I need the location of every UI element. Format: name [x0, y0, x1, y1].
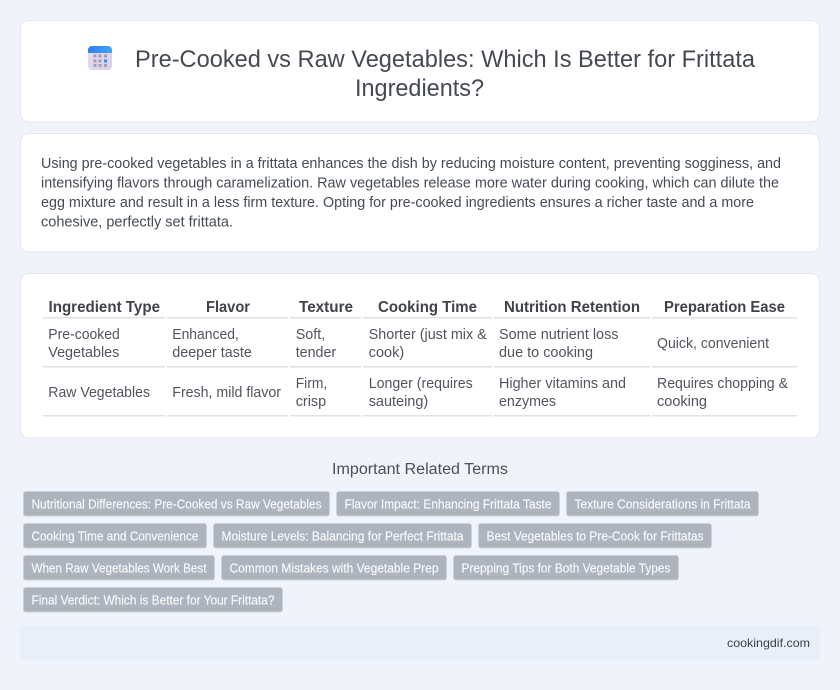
- table row: pre-cooked vegetables: [48, 327, 769, 361]
- text block: summary: intensifying flavors through caramelization. Raw vegetables release more water during cooking, which can dilute the: [41, 176, 779, 192]
- table row: pre-cooked vegetables: Vegetables: [48, 345, 119, 361]
- tag: texture considerations: Texture Considerations in Frittata: [574, 498, 751, 512]
- table row: raw vegetables: Longer (requires: [369, 376, 473, 392]
- table header: [48, 299, 785, 316]
- title: Ingredients?: [355, 75, 484, 102]
- table header: Nutrition Retention: [504, 299, 640, 316]
- tag: cooking time: Cooking Time and Convenience: [32, 530, 199, 544]
- title: [135, 46, 756, 102]
- table row: pre-cooked vegetables: Enhanced,: [172, 327, 239, 343]
- text block: summary: [41, 156, 781, 230]
- text block: summary: egg mixture and result in a less firm texture. Opting for pre-cooked ingredients ensures a richer taste and a more: [41, 195, 754, 211]
- text block: summary: Using pre-cooked vegetables in a frittata enhances the dish by reducing moisture content, preventing sogginess, and: [41, 156, 781, 172]
- tag: nutritional differences: Nutritional Differences: Pre-Cooked vs Raw Vegetables: [32, 498, 322, 512]
- table row: raw vegetables: Firm,: [296, 376, 327, 392]
- panel: related term tags: [24, 492, 758, 612]
- title: Pre-Cooked vs Raw Vegetables: Which Is Better for Frittata: [135, 46, 756, 73]
- table row: raw vegetables: Raw Vegetables: [48, 385, 150, 401]
- table row: raw vegetables: crisp: [296, 394, 326, 410]
- tag: moisture levels: [214, 524, 472, 548]
- table row: pre-cooked vegetables: deeper taste: [172, 345, 252, 361]
- table row: pre-cooked vegetables: Quick, convenient: [657, 336, 769, 352]
- table row: raw vegetables: Requires chopping &: [657, 376, 788, 392]
- tag: final verdict: Final Verdict: Which is Better for Your Frittata?: [32, 594, 275, 608]
- table header: Preparation Ease: [664, 299, 785, 316]
- icon: calendar: [88, 46, 112, 70]
- table row: raw vegetables: sauteing): [369, 394, 428, 410]
- table header: Texture: [299, 299, 353, 316]
- panel: summary paragraph: [20, 134, 820, 252]
- table row: pre-cooked vegetables: Some nutrient loss: [499, 327, 618, 343]
- table row: pre-cooked vegetables: Pre-cooked: [48, 327, 120, 343]
- panel: title card: [20, 20, 820, 122]
- table row: pre-cooked vegetables: cook): [369, 345, 404, 361]
- tag: final verdict: [24, 588, 282, 612]
- footer bar: [20, 626, 820, 660]
- table row: raw vegetables: [48, 376, 788, 410]
- tag: best vegetables: Best Vegetables to Pre-Cook for Frittatas: [486, 530, 704, 544]
- tag: texture considerations: [566, 492, 758, 516]
- tag: moisture levels: Moisture Levels: Balancing for Perfect Frittata: [222, 530, 464, 544]
- footer source text: cookingdif.com: [727, 636, 810, 650]
- tag: raw vegetables: [24, 556, 214, 580]
- tag: common mistakes: [222, 556, 446, 580]
- tag: nutritional differences: [24, 492, 330, 516]
- table row: raw vegetables: cooking: [657, 394, 707, 410]
- tag: prepping tips: [454, 556, 678, 580]
- tag: best vegetables: [478, 524, 712, 548]
- table row: pre-cooked vegetables: Shorter (just mix &: [369, 327, 487, 343]
- table row: pre-cooked vegetables: due to cooking: [499, 345, 593, 361]
- table row: pre-cooked vegetables: Soft,: [296, 327, 325, 343]
- tag: common mistakes: Common Mistakes with Vegetable Prep: [230, 562, 439, 576]
- tag: prepping tips: Prepping Tips for Both Vegetable Types: [462, 562, 670, 576]
- table row: pre-cooked vegetables: tender: [296, 345, 336, 361]
- table header: Ingredient Type: [48, 299, 160, 316]
- tag: cooking time: [24, 524, 206, 548]
- table header: Flavor: [206, 299, 250, 316]
- heading: related terms: Important Related Terms: [332, 461, 508, 478]
- table row: raw vegetables: Fresh, mild flavor: [172, 385, 281, 401]
- tag: flavor impact: [336, 492, 560, 516]
- panel: comparison table: [20, 274, 820, 438]
- tag: flavor impact: Flavor Impact: Enhancing Frittata Taste: [344, 498, 552, 512]
- table row: raw vegetables: Higher vitamins and: [499, 376, 626, 392]
- tag: raw vegetables: When Raw Vegetables Work Best: [32, 562, 207, 576]
- text block: summary: cohesive, perfectly set frittata.: [41, 214, 233, 230]
- table row: raw vegetables: enzymes: [499, 394, 556, 410]
- table header: Cooking Time: [378, 299, 477, 316]
